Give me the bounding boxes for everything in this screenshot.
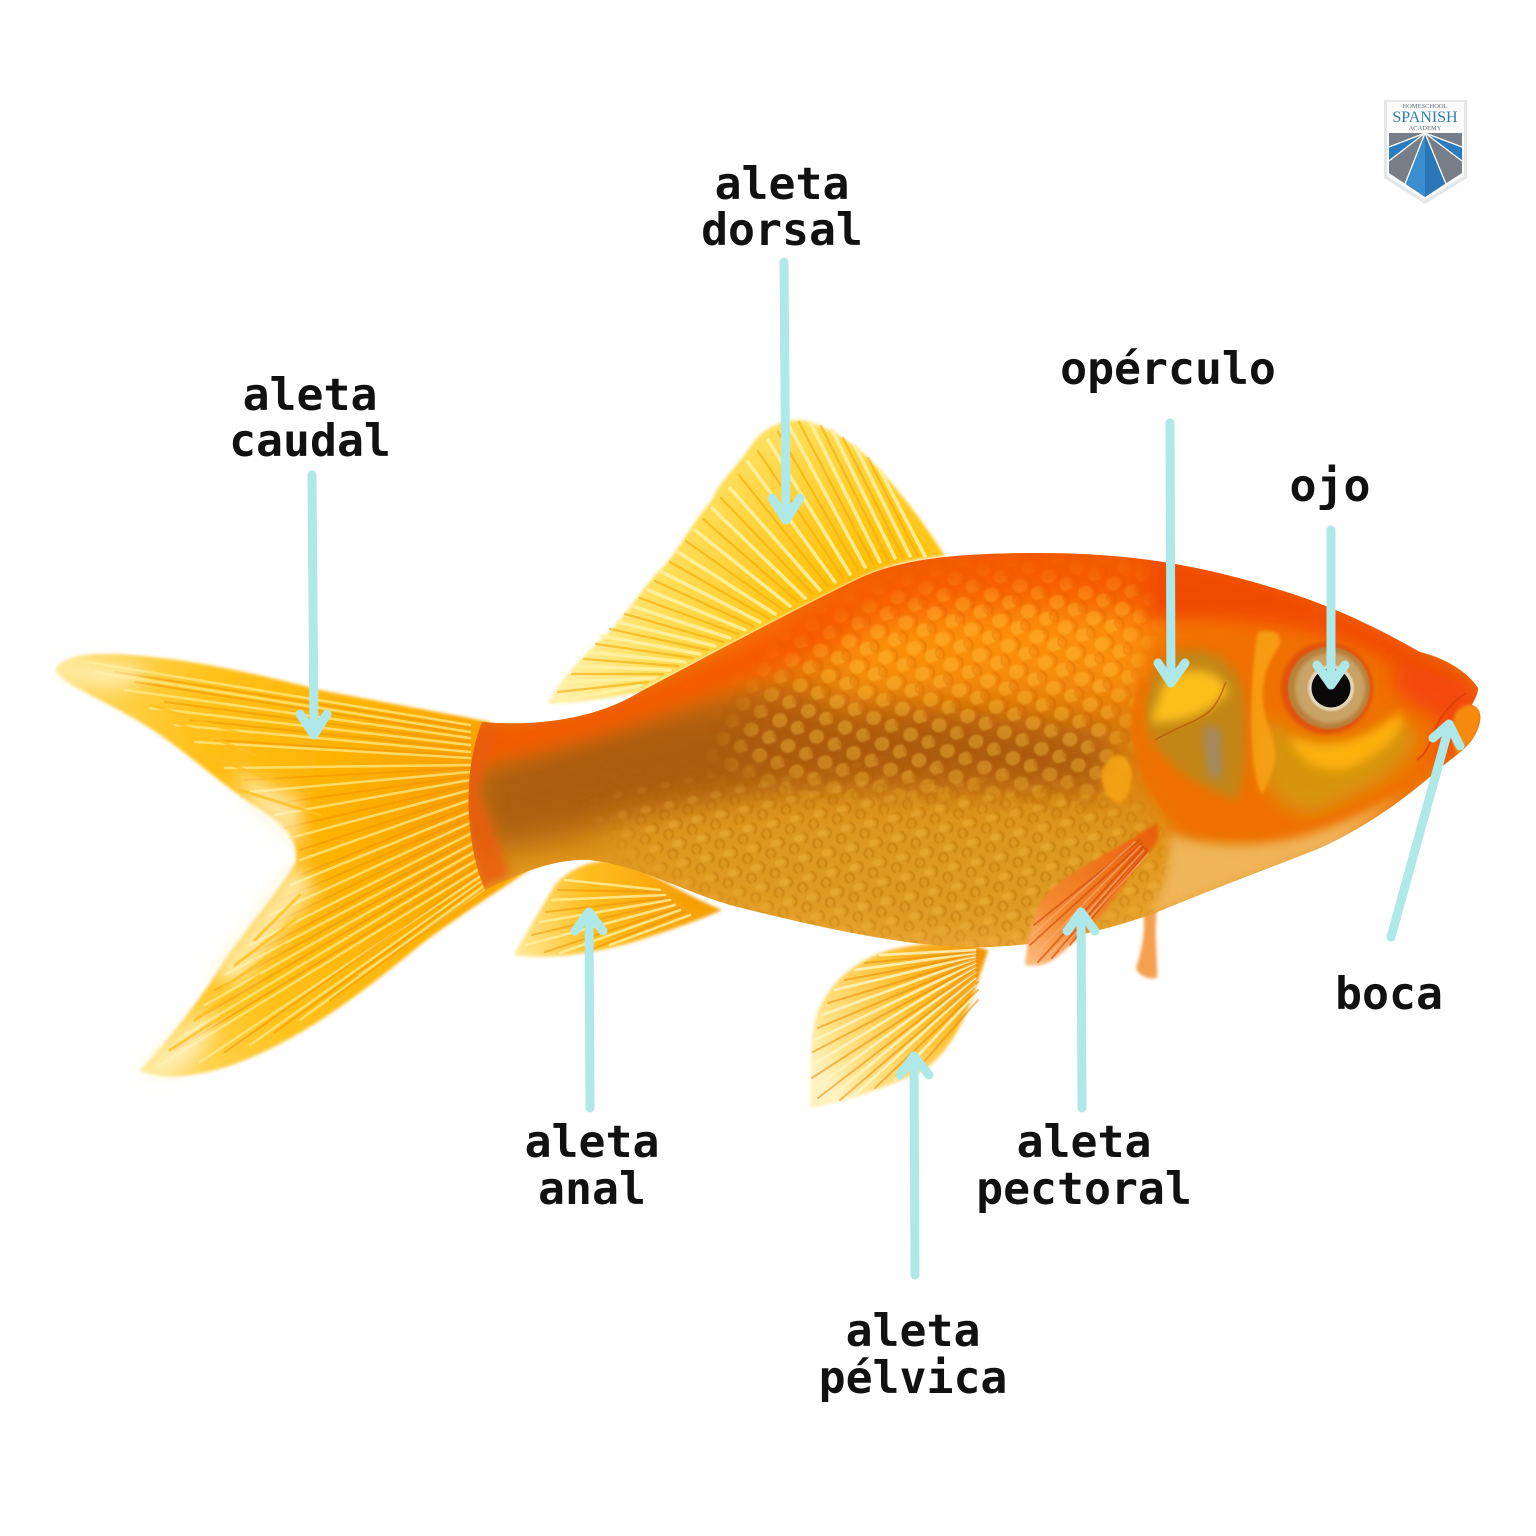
arrow: aleta dorsal: [772, 262, 800, 520]
label: aleta dorsal: aleta: [715, 157, 849, 210]
arrow: boca: [1391, 724, 1460, 937]
label: aleta anal: anal: [538, 1162, 646, 1215]
eye: [1281, 642, 1373, 734]
label: aleta dorsal: dorsal: [701, 203, 863, 256]
lower lip: [1452, 704, 1481, 756]
label: opérculo: opérculo: [1060, 342, 1276, 395]
bright scales patch: [820, 601, 1150, 710]
arrow: aleta pectoral: [1067, 912, 1095, 1108]
yellow cheek highlight: [1290, 712, 1403, 770]
anal fin: [514, 860, 722, 957]
goldfish illustration: [55, 420, 1500, 1108]
right pelvic fin sliver: [1136, 905, 1158, 978]
lip line: [1417, 693, 1466, 760]
orange back highlight: [470, 562, 1420, 765]
gill rim: [1132, 679, 1166, 810]
caudal pale tips: [55, 663, 315, 1078]
pelvic fin: [810, 943, 988, 1108]
arrow: aleta anal: [575, 912, 603, 1108]
logo: Homeschool Spanish Academy shield: HOMESCHOOL: [1402, 103, 1448, 110]
logo: Homeschool Spanish Academy shield: ACADEMY: [1409, 125, 1442, 132]
arrow: aleta pélvica: [900, 1056, 929, 1275]
head base: [1140, 626, 1480, 850]
peduncle edge: [468, 722, 513, 890]
cheek gold: [1260, 715, 1416, 815]
label: aleta caudal: aleta: [243, 368, 377, 421]
head top red: [1150, 555, 1478, 700]
label: aleta pélvica: pélvica: [819, 1351, 1007, 1404]
label: ojo: ojo: [1290, 459, 1370, 512]
arrow: aleta caudal: [300, 475, 327, 735]
label: aleta pectoral: pectoral: [976, 1162, 1192, 1215]
pectoral fin: [1025, 822, 1158, 966]
pre-opercle ridge: [1251, 631, 1280, 795]
caudal fin: [55, 654, 532, 1078]
label: aleta pectoral: aleta: [1017, 1115, 1151, 1168]
arrow: opérculo: [1158, 423, 1185, 683]
logo: Homeschool Spanish Academy shield: SPANISH: [1392, 109, 1458, 126]
logo: Homeschool Spanish Academy shield: [1384, 100, 1467, 204]
arrow: ojo: [1317, 530, 1345, 685]
label: aleta caudal: caudal: [229, 414, 391, 467]
caudal rays, pale: [75, 660, 505, 1065]
label: aleta pélvica: aleta: [846, 1304, 980, 1357]
dark lateral band: [470, 690, 1110, 855]
gold belly: [600, 803, 1140, 939]
gold scales behind gill: [1102, 755, 1132, 803]
pupil: [1312, 668, 1350, 708]
label: aleta anal: aleta: [525, 1115, 659, 1168]
dorsal fin: [548, 420, 945, 703]
body: [450, 540, 1500, 960]
scales upper: [719, 572, 1154, 805]
operculum: [1144, 650, 1246, 800]
label: boca: boca: [1335, 967, 1443, 1020]
snout red: [1395, 660, 1480, 770]
caudal fringe rays: [150, 705, 320, 1050]
scales lower: [614, 772, 1164, 948]
throat pale: [1150, 790, 1410, 915]
